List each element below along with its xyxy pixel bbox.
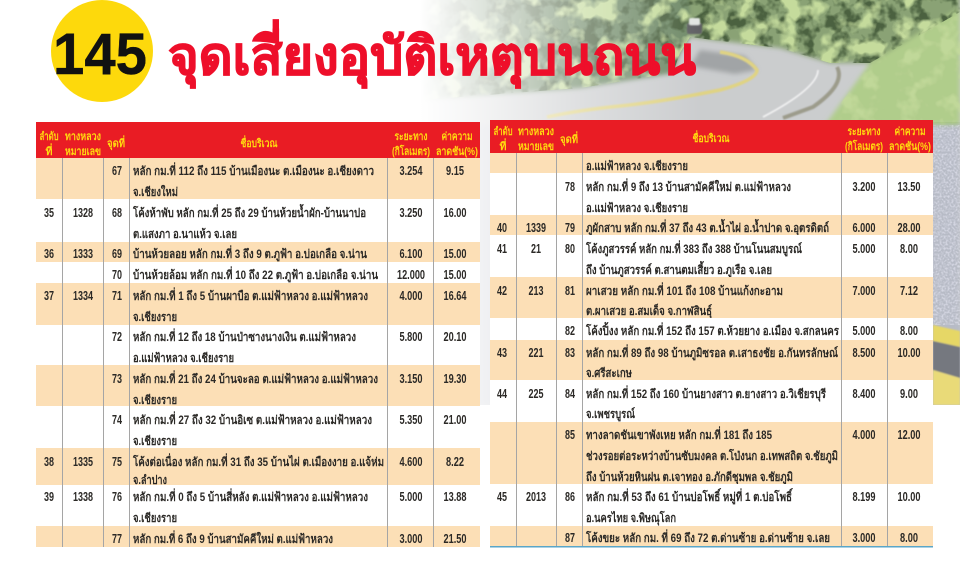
panel: left table [36, 122, 480, 547]
row 79: 6.000 [852, 220, 876, 235]
right table header: ระยะทาง [848, 126, 880, 138]
row 71: 16.64 [444, 288, 467, 303]
right table header: ที่ [500, 138, 506, 153]
row 82: 8.00 [900, 323, 918, 338]
row 72: อ.แม่ฟ้าหลวง จ.เชียงราย [133, 351, 234, 365]
row 85: ช่วงรอยต่อระหว่างบ้านซับมงคล ต.โป่งนก อ.เทพสถิต จ.ชัยภูมิ [586, 448, 838, 464]
row 71: หลัก กม.ที่ 1 ถึง 5 บ้านผาบือ ต.แม่ฟ้าหลวง อ.แม่ฟ้าหลวง [133, 287, 368, 303]
title: จุดเสี่ยงอุบัติเหตุบนถนน [168, 20, 696, 89]
row 70 [36, 262, 480, 283]
row 81: ต.ผาเสวย อ.สมเด็จ จ.กาฬสินธุ์ [586, 303, 712, 319]
left table header: ที่ [46, 143, 52, 158]
row 69: 1333 [73, 246, 93, 261]
row 87: 3.000 [852, 530, 876, 545]
row 86: 8.199 [852, 489, 876, 504]
row 87 [490, 526, 933, 546]
row 86: หลัก กม.ที่ 53 ถึง 61 บ้านบ่อโพธิ์ หมู่ที่ 1 ต.บ่อโพธิ์ [586, 488, 793, 505]
row 73: 19.30 [444, 371, 466, 386]
row 71: 4.000 [400, 288, 422, 303]
row 72: หลัก กม.ที่ 12 ถึง 18 บ้านป่าซางนางเงิน ต.แม่ฟ้าหลวง [133, 328, 356, 344]
row 86 [490, 484, 933, 526]
row 76: 1338 [73, 489, 93, 504]
left table header: ระยะทาง [394, 131, 428, 143]
row 86: 86 [565, 489, 575, 504]
row 73: หลัก กม.ที่ 21 ถึง 24 บ้านจะลอ ต.แม่ฟ้าหลวง อ.แม่ฟ้าหลวง [133, 370, 378, 386]
row 73: 73 [112, 371, 122, 386]
right table header: หมายเลข [518, 141, 554, 153]
row 81: ผาเสวย หลัก กม.ที่ 101 ถึง 108 บ้านแก้งกะอาม [586, 282, 783, 298]
row 85: 12.00 [898, 427, 920, 442]
row 85 [490, 422, 933, 485]
right table header: (กิโลเมตร) [845, 139, 883, 153]
row 82: 5.000 [852, 323, 876, 338]
row 68: 3.250 [400, 205, 422, 220]
row 80: 80 [565, 241, 575, 256]
row 73: 3.150 [400, 371, 422, 386]
row 76: หลัก กม.ที่ 0 ถึง 5 บ้านสี่หลัง ต.แม่ฟ้าหลวง อ.แม่ฟ้าหลวง [133, 488, 368, 504]
row 69 [36, 242, 480, 262]
row 74: หลัก กม.ที่ 27 ถึง 32 บ้านอิเซ ต.แม่ฟ้าหลวง อ.แม่ฟ้าหลวง [133, 411, 372, 427]
row 84 [490, 380, 933, 422]
row 86: อ.นครไทย จ.พิษณุโลก [586, 510, 676, 526]
row 74: จ.เชียงราย [133, 434, 177, 448]
row 79: 28.00 [898, 220, 920, 235]
right table header: ค่าความ [894, 126, 926, 138]
row 87: 8.00 [900, 530, 918, 545]
right table header: ทางหลวง [518, 126, 554, 138]
row 70: 70 [112, 267, 122, 282]
row 73: จ.เชียงราย [133, 393, 177, 407]
left table header: ทางหลวง [65, 131, 101, 143]
row 72: 20.10 [444, 329, 466, 344]
row 81: 213 [528, 283, 544, 298]
row 68: 68 [112, 205, 122, 220]
row 83: 221 [528, 345, 544, 360]
row 75: 1335 [73, 454, 93, 469]
row 69: บ้านห้วยลอย หลัก กม.ที่ 3 ถึง 9 ต.ภูฟ้า อ.บ่อเกลือ จ.น่าน [133, 245, 368, 262]
row 67: 3.254 [400, 163, 423, 178]
row 75: จ.ลำปาง [133, 473, 167, 487]
left table header: ชื่อบริเวณ [240, 135, 278, 150]
row 87: 87 [565, 530, 575, 545]
row 84: หลัก กม.ที่ 152 ถึง 160 บ้านยางสาว ต.ยางสาว อ.วิเชียรบุรี [586, 385, 826, 402]
row 68: 35 [44, 205, 54, 220]
row 83: หลัก กม.ที่ 89 ถึง 98 บ้านภูมิซรอล ต.เสาธงชัย อ.กันทรลักษณ์ [586, 344, 838, 361]
row 79: 79 [565, 220, 575, 235]
row 76: 5.000 [400, 489, 422, 504]
row 70: 15.00 [444, 267, 466, 282]
row 67: 67 [112, 163, 122, 178]
row 80: ถึง บ้านภูสวรรค์ ต.สานตมเสี้ยว อ.ภูเรือ จ.เลย [586, 260, 772, 278]
row 78: 78 [565, 179, 575, 194]
left table header [36, 122, 480, 158]
row 85: ทางลาดชันเขาพังเหย หลัก กม.ที่ 181 ถึง 185 [586, 426, 772, 442]
right table header: ลำดับ [494, 125, 513, 138]
row 86: 45 [497, 489, 507, 504]
row 71: จ.เชียงราย [133, 310, 177, 324]
row 82: โค้งปิ้งง หลัก กม.ที่ 152 ถึง 157 ต.ห้วยยาง อ.เมือง จ.สกลนคร [585, 321, 839, 338]
row 83: 8.500 [852, 345, 876, 360]
row 84: 9.00 [900, 386, 918, 401]
row 85: 85 [565, 427, 575, 442]
right table header: ชื่อบริเวณ [692, 130, 730, 145]
left table header: หมายเลข [65, 146, 101, 158]
row 74: 5.350 [400, 412, 422, 427]
row 77: 77 [112, 531, 122, 546]
row 74: 74 [112, 412, 123, 427]
row 78: 13.50 [898, 179, 920, 194]
row 71 [36, 283, 480, 325]
row 79: ภูผักสาบ หลัก กม.ที่ 37 ถึง 43 ต.น้ำไผ่ อ.น้ำปาด จ.อุตรดิตถ์ [586, 218, 829, 236]
row 76: 76 [112, 489, 122, 504]
row 68: โค้งห้าพับ หลัก กม.ที่ 25 ถึง 29 บ้านห้วยน้ำผัก-บ้านนาปอ [132, 203, 366, 220]
row 74 [36, 406, 480, 448]
row 78: อ.แม่ฟ้าหลวง จ.เชียงราย [586, 201, 688, 215]
row 86: 2013 [526, 489, 546, 504]
row 81: 42 [497, 283, 507, 298]
row 81 [490, 277, 933, 319]
background photo: mountain road [420, 0, 960, 405]
row 83: 43 [497, 345, 507, 360]
row 76: 39 [44, 489, 54, 504]
badge: 145 yellow circle [51, 0, 153, 102]
row 71: 1334 [73, 288, 94, 303]
row 83: 83 [565, 345, 575, 360]
row 78: 3.200 [852, 179, 876, 194]
right table header: ลาดชัน(%) [889, 140, 931, 153]
row 76: 13.88 [444, 489, 466, 504]
row 68: 1328 [73, 205, 93, 220]
badge: 145 yellow circle: 145 [53, 22, 147, 87]
row 75: 4.600 [400, 454, 422, 469]
left table header: (กิโลเมตร) [392, 144, 430, 158]
row 87: โค้งขยะ หลัก กม. ที่ 69 ถึง 72 ต.ด่านซ้าย อ.ด่านซ้าย จ.เลย [585, 529, 830, 545]
row 75: 75 [112, 454, 122, 469]
row 72: 5.800 [400, 329, 422, 344]
row 77: หลัก กม.ที่ 6 ถึง 9 บ้านสามัคคีใหม่ ต.แม่ฟ้าหลวง [133, 530, 333, 546]
row 75 [36, 448, 480, 487]
left table header: ค่าความ [442, 131, 472, 143]
right table header [490, 120, 933, 153]
row 82 [490, 318, 933, 340]
row 72 [36, 325, 480, 365]
row 80: 8.00 [900, 241, 918, 256]
row 68 [36, 199, 480, 242]
row 78 [490, 173, 933, 215]
row 80: 41 [497, 241, 507, 256]
row 83 [490, 340, 933, 380]
row 79: 1339 [526, 220, 546, 235]
row 67: จ.เชียงใหม่ [133, 184, 178, 199]
row 80: 21 [531, 241, 541, 256]
row 82: 82 [565, 323, 575, 338]
row 67: หลัก กม.ที่ 112 ถึง 115 บ้านเมืองนะ ต.เมืองนะ อ.เชียงดาว [133, 162, 374, 178]
row 80 [490, 235, 933, 278]
row 84: จ.เพชรบูรณ์ [586, 407, 635, 422]
row 80: โค้งภูสวรรค์ หลัก กม.ที่ 383 ถึง 388 บ้านโนนสมบูรณ์ [585, 240, 802, 257]
row 77 continued: อ.แม่ฟ้าหลวง จ.เชียงราย [586, 159, 688, 173]
row 83: 10.00 [898, 345, 920, 360]
left table header: ลำดับ [40, 130, 59, 143]
row 70: บ้านห้วยล้อม หลัก กม.ที่ 10 ถึง 22 ต.ภูฟ้า อ.บ่อเกลือ จ.น่าน [133, 266, 379, 283]
row 77 continued [490, 153, 933, 173]
row 70: 12.000 [397, 267, 425, 282]
row 81: 7.12 [900, 283, 918, 298]
row 67: 9.15 [446, 163, 464, 178]
row 76: จ.เชียงราย [133, 511, 177, 525]
row 83: จ.ศรีสะเกษ [586, 366, 632, 380]
row 73 [36, 365, 480, 407]
row 77 [36, 526, 480, 547]
row 81: 81 [565, 283, 575, 298]
row 74: 21.00 [444, 412, 466, 427]
row 67 [36, 158, 480, 199]
row 75: 8.22 [446, 454, 464, 469]
row 76 [36, 485, 480, 526]
row 71: 71 [112, 288, 122, 303]
row 84: 84 [565, 386, 576, 401]
row 78: หลัก กม.ที่ 9 ถึง 13 บ้านสามัคคีใหม่ ต.แม่ฟ้าหลวง [586, 178, 791, 194]
row 77: 21.50 [444, 531, 466, 546]
row 69: 15.00 [444, 246, 466, 261]
row 79 [490, 215, 933, 236]
right table header: จุดที่ [560, 131, 578, 147]
panel: right table [490, 120, 933, 546]
row 80: 5.000 [852, 241, 876, 256]
row 81: 7.000 [852, 283, 876, 298]
row 69: 69 [112, 246, 122, 261]
row 86: 10.00 [898, 489, 920, 504]
row 75: โค้งต่อเนื่อง หลัก กม.ที่ 31 ถึง 35 บ้านไผ่ ต.เมืองงาย อ.แจ้ห่ม [132, 453, 384, 469]
row 79: 40 [497, 220, 507, 235]
row 71: 37 [44, 288, 54, 303]
row 75: 38 [44, 454, 54, 469]
row 84: 225 [528, 386, 544, 401]
row 85: 4.000 [852, 427, 876, 442]
row 85: ถึง บ้านห้วยหินฝน ต.เจาทอง อ.ภักดีชุมพล จ.ชัยภูมิ [586, 470, 793, 485]
row 72: 72 [112, 329, 122, 344]
row 69: 6.100 [400, 246, 422, 261]
left table header: ลาดชัน(%) [436, 145, 478, 158]
left table header: จุดที่ [107, 135, 125, 151]
row 77: 3.000 [400, 531, 422, 546]
row 84: 8.400 [852, 386, 876, 401]
row 84: 44 [497, 386, 508, 401]
row 69: 36 [44, 246, 54, 261]
row 68: ต.แสงภา อ.นาแห้ว จ.เลย [133, 227, 237, 241]
row 68: 16.00 [444, 205, 466, 220]
